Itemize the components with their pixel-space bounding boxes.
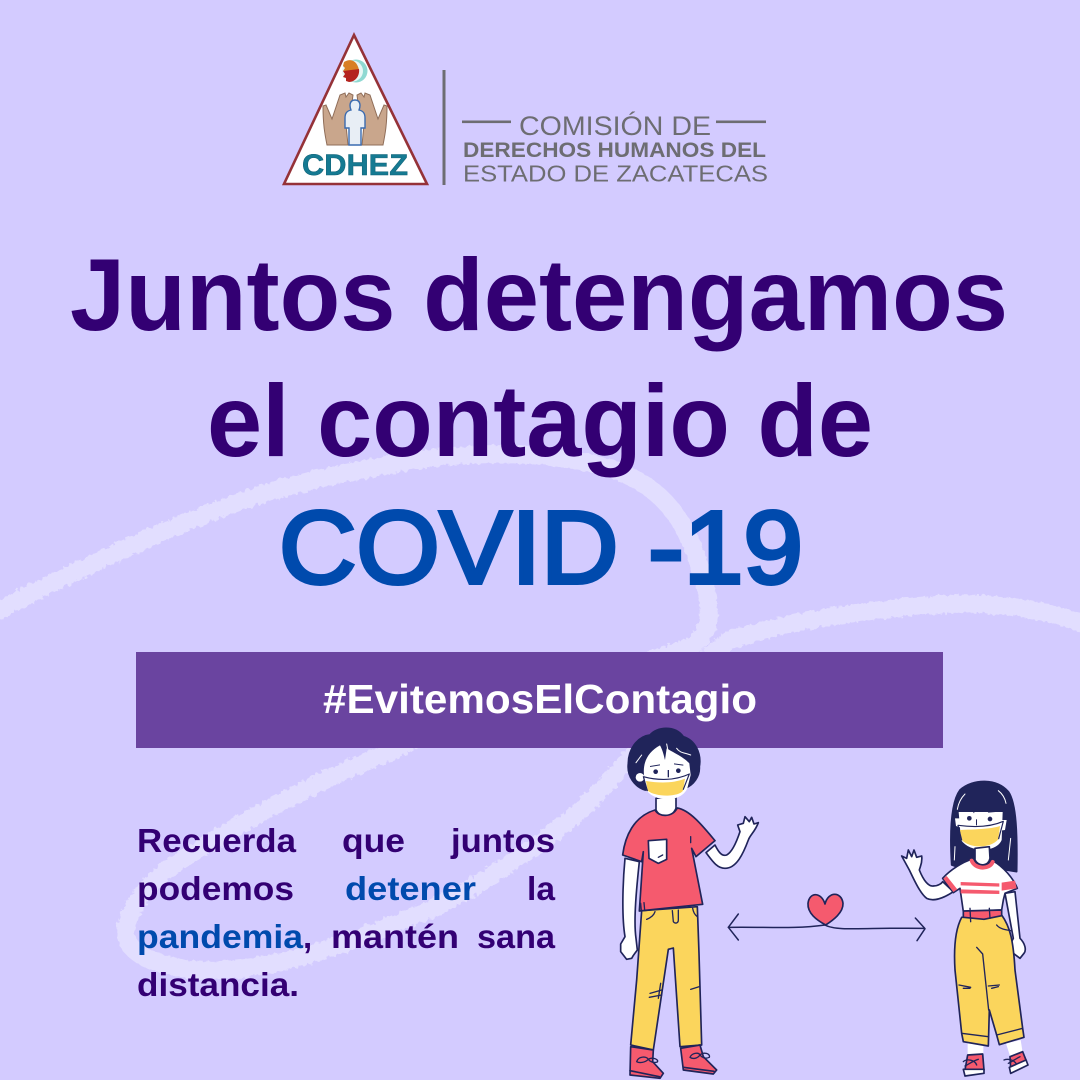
icon: hands and person	[323, 93, 387, 145]
logo separator	[442, 70, 446, 185]
body text: la	[527, 870, 556, 907]
body text: detener	[345, 870, 476, 907]
title line 3: COVID -19	[279, 490, 803, 605]
man eyes and nose	[650, 763, 683, 777]
body text: que	[342, 822, 405, 859]
illustration: man with mask	[621, 728, 758, 1078]
hashtag banner	[136, 652, 943, 748]
woman belt	[963, 910, 1002, 919]
man arm left	[621, 858, 639, 959]
woman neck	[975, 847, 990, 865]
body text: ,	[303, 918, 312, 955]
icon: heart	[808, 894, 843, 925]
man pants	[631, 907, 702, 1050]
woman eyes	[967, 816, 992, 825]
man shirt	[623, 808, 715, 911]
body text: distancia.	[137, 966, 299, 1003]
woman shirt stripes	[943, 876, 1017, 894]
logo triangle	[284, 35, 427, 184]
woman shirt	[943, 859, 1017, 912]
body text: juntos	[450, 822, 555, 859]
title line 2: el contagio de	[207, 364, 873, 478]
man shoes	[630, 1045, 717, 1078]
body text: mantén	[331, 918, 459, 955]
man mask	[646, 779, 685, 796]
woman bangs	[959, 797, 1003, 813]
woman face	[959, 812, 1003, 850]
title line 1: Juntos detengamos	[70, 238, 1008, 352]
man pocket	[648, 839, 667, 863]
body text: podemos	[137, 870, 294, 907]
illustration: woman with mask	[902, 781, 1028, 1076]
background swoosh strokes	[0, 454, 1080, 970]
man hair	[628, 728, 700, 790]
logo text line 3: ESTADO DE ZACATECAS	[463, 160, 768, 186]
man mask straps	[643, 774, 689, 791]
man hair highlights	[636, 744, 691, 763]
man neck	[656, 797, 676, 816]
woman arm right	[1005, 892, 1025, 958]
body text: sana	[477, 918, 556, 955]
body text: pandemia	[137, 918, 304, 955]
woman hair highlights	[954, 791, 1011, 860]
woman pants	[955, 915, 1024, 1046]
man ear	[636, 773, 644, 782]
body text: Recuerda	[137, 822, 297, 859]
man details	[641, 837, 699, 998]
woman collar	[972, 861, 993, 868]
woman details	[959, 908, 1023, 1037]
logo text line 1: COMISIÓN DE	[519, 110, 711, 141]
woman shoe soles	[963, 1060, 1028, 1076]
logo text line 2: DERECHOS HUMANOS DEL	[463, 138, 766, 162]
icon: sun emblem	[342, 60, 368, 82]
man shoe soles	[630, 1067, 714, 1077]
woman mask straps	[958, 821, 1003, 840]
woman shoe laces	[963, 1057, 1020, 1066]
woman mask	[960, 826, 1000, 846]
man arm right	[706, 817, 758, 868]
man shoe laces	[637, 1053, 709, 1063]
woman socks	[968, 1040, 1023, 1056]
distance arrow with heart	[728, 894, 925, 941]
woman shoes	[965, 1052, 1027, 1070]
woman ears	[955, 818, 1007, 831]
logo	[284, 35, 768, 186]
body text	[137, 822, 556, 1003]
logo rule left	[462, 120, 511, 123]
logo wordmark CDHEZ: CDHEZ	[302, 149, 408, 182]
woman hair	[951, 781, 1017, 872]
man face	[644, 745, 691, 799]
woman arm left	[902, 850, 953, 900]
logo rule right	[716, 120, 766, 123]
hashtag banner: #EvitemosElContagio	[323, 676, 757, 722]
